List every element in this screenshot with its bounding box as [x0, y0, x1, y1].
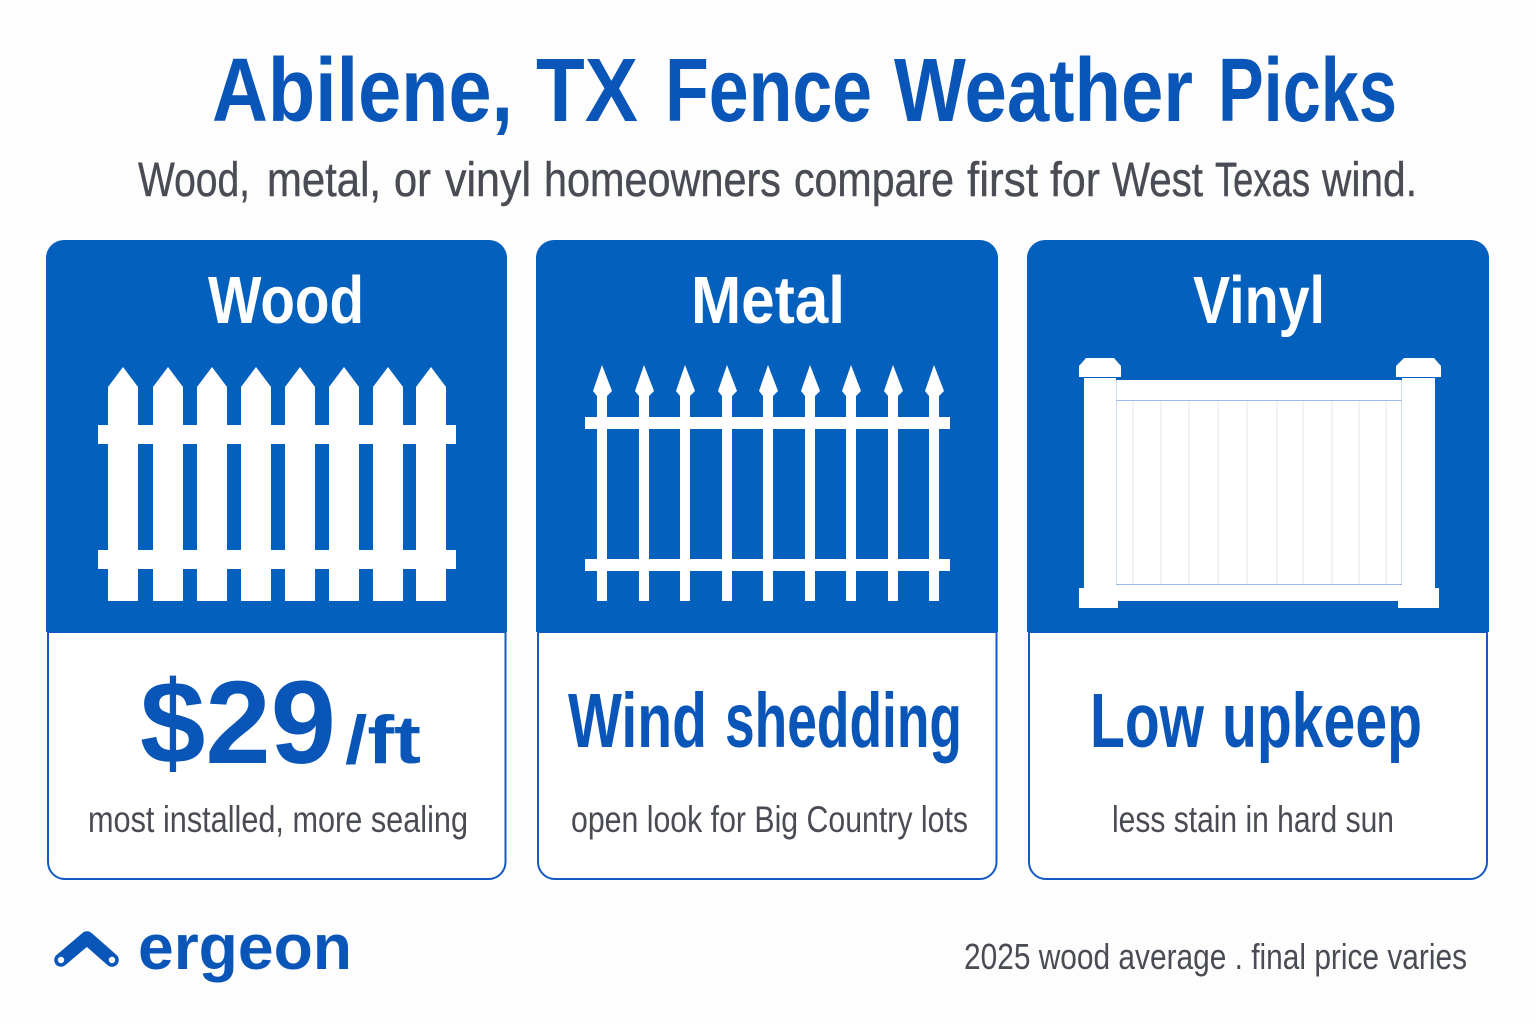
- title: Weather: [894, 41, 1193, 141]
- callout: wind shedding: shedding: [725, 678, 962, 764]
- title: Fence: [665, 41, 872, 141]
- logo: ergeon: [58, 911, 352, 983]
- heading: metal: Metal: [691, 263, 845, 338]
- callout: low upkeep: upkeep: [1222, 678, 1422, 764]
- subtitle: vinyl: [445, 154, 531, 207]
- panel: metal: [536, 240, 998, 879]
- subtitle: first: [967, 154, 1038, 207]
- caption: vinyl: less stain in hard sun: [1112, 799, 1394, 840]
- icon: vinyl privacy fence: [1079, 358, 1441, 608]
- price: $29/ft: $29: [140, 657, 336, 789]
- title: TX: [536, 41, 638, 141]
- icon: chevron roof: [58, 938, 115, 963]
- wordmark: ergeon: [138, 911, 352, 983]
- subtitle: metal,: [267, 154, 381, 207]
- subtitle: Texas: [1215, 154, 1310, 207]
- panel: vinyl: [1027, 240, 1489, 879]
- caption: wood: most installed, more sealing: [88, 799, 468, 840]
- subtitle: homeowners: [544, 154, 781, 207]
- icon: wood picket fence: [98, 367, 456, 601]
- panel: wood: [46, 240, 507, 879]
- subtitle: or: [394, 154, 431, 207]
- icon: metal spear fence: [585, 365, 950, 601]
- subtitle: for: [1050, 154, 1100, 207]
- heading: vinyl: Vinyl: [1193, 263, 1325, 338]
- price: $29/ft: /ft: [345, 702, 421, 778]
- subtitle: West: [1112, 154, 1203, 207]
- subtitle: Wood,: [138, 154, 250, 207]
- subtitle: compare: [794, 154, 954, 207]
- title: Picks: [1218, 41, 1397, 141]
- heading: wood: Wood: [208, 263, 364, 338]
- caption: metal: open look for Big Country lots: [571, 799, 968, 840]
- callout: low upkeep: Low: [1090, 678, 1205, 764]
- callout: wind shedding: Wind: [568, 678, 707, 764]
- title: Abilene,: [212, 41, 513, 141]
- subtitle: wind.: [1321, 154, 1417, 207]
